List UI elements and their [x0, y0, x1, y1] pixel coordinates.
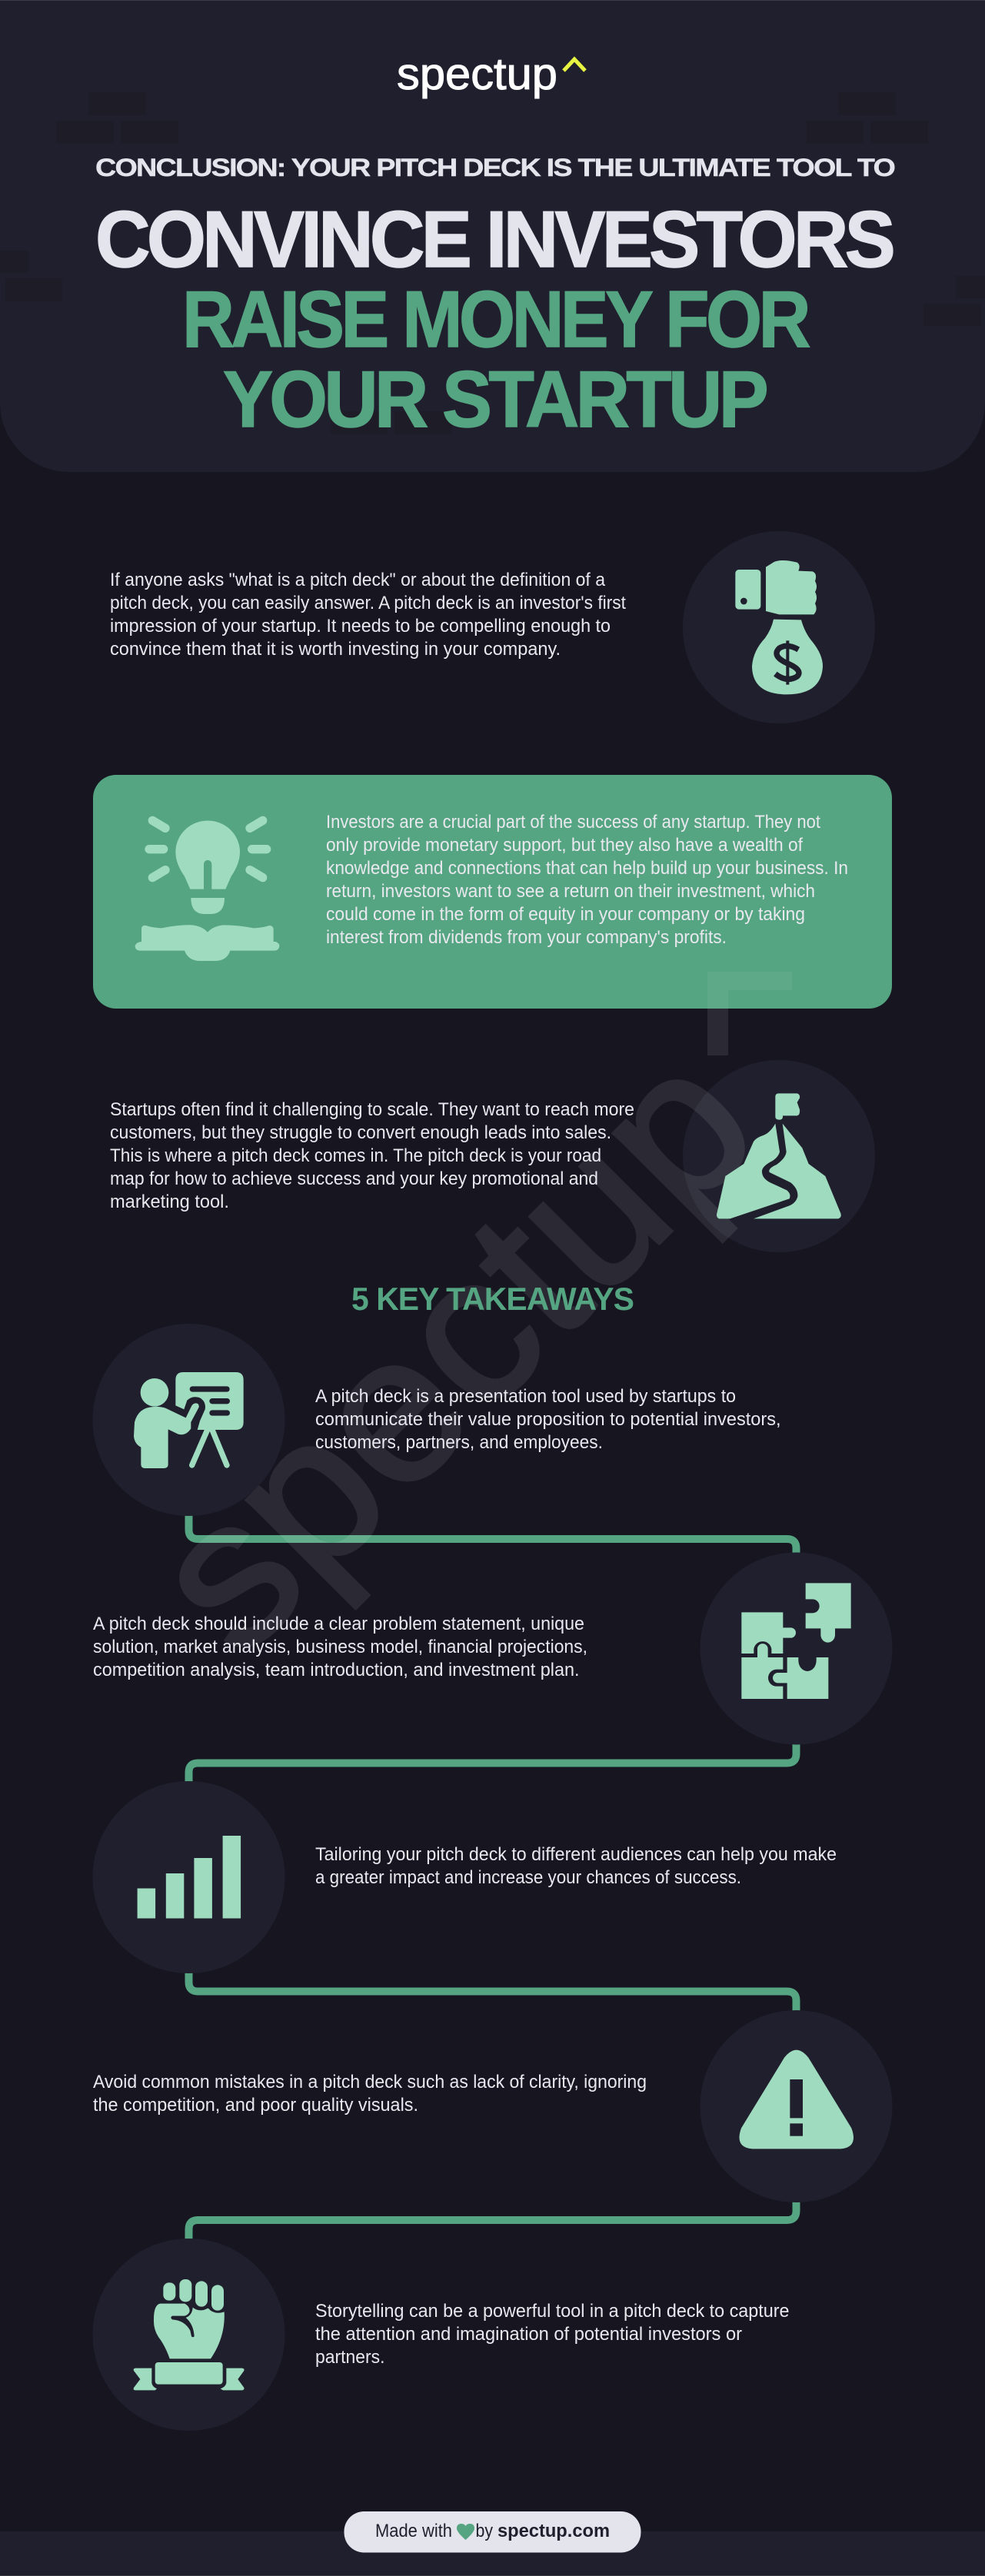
text: takeaway 3: Tailoring your pitch deck to different audiences can help you make [315, 1844, 837, 1865]
text: scaling paragraph: map for how to achieve success and your key promotional and [110, 1168, 598, 1189]
text: investors paragraph: only provide monetary support, but they also have a wealth of [326, 835, 803, 856]
footer badge: Made with [375, 2521, 452, 2541]
title: CONVINCE INVESTORS [95, 195, 893, 284]
text: intro paragraph [110, 570, 626, 660]
title: RAISE MONEY FOR [182, 275, 810, 364]
text: scaling paragraph [110, 1099, 634, 1212]
text: investors paragraph: interest from dividends from your company's profits. [326, 927, 727, 948]
text: investors paragraph: could come in the form of equity in your company or by taking [326, 904, 805, 925]
panel: header [0, 0, 985, 472]
text: takeaway 5: the attention and imagination of potential investors or [315, 2324, 742, 2345]
icon circle backgrounds [92, 531, 892, 2431]
icon: bar chart [138, 1836, 241, 1919]
text: takeaway 3: a greater impact and increase your chances of success. [315, 1867, 741, 1888]
icon: puzzle pieces [741, 1583, 851, 1699]
logo: spectup [397, 49, 557, 99]
watermark: spectup [106, 1004, 797, 1695]
footer badge [344, 2511, 641, 2552]
text: takeaway 1: A pitch deck is a presentation tool used by startups to [315, 1386, 736, 1407]
text: scaling paragraph: customers, but they struggle to convert enough leads into sales. [110, 1122, 611, 1143]
icon: warning triangle [739, 2050, 854, 2149]
text: intro paragraph: impression of your startup. It needs to be compelling enough to [110, 616, 611, 637]
text: takeaway 1: communicate their value proposition to potential investors, [315, 1409, 781, 1430]
text: takeaway 3 [315, 1844, 837, 1888]
icon: light bulb and book [135, 820, 279, 961]
footer badge: spectup.com [497, 2521, 610, 2541]
text: takeaway 5: Storytelling can be a powerful tool in a pitch deck to capture [315, 2301, 789, 2322]
text: investors paragraph [326, 812, 848, 948]
text: investors paragraph: return, investors want to see a return on their investment, which [326, 881, 815, 902]
text: intro paragraph: pitch deck, you can easily answer. A pitch deck is an investor's first [110, 593, 626, 613]
text: intro paragraph: If anyone asks "what is a pitch deck" or about the definition of a [110, 570, 606, 590]
footer strip [0, 2531, 985, 2576]
subtitle: CONCLUSION: YOUR PITCH DECK IS THE ULTIMATE TOOL TO [95, 154, 895, 181]
title [95, 195, 893, 444]
text: takeaway 2: A pitch deck should include a clear problem statement, unique [93, 1614, 584, 1634]
footer badge: by [475, 2521, 493, 2541]
text: takeaway 1: customers, partners, and employees. [315, 1432, 603, 1453]
text: takeaway 4: the competition, and poor quality visuals. [93, 2095, 418, 2116]
text: investors paragraph: knowledge and connections that can help build up your business. In [326, 858, 848, 879]
panel: investors callout [93, 775, 892, 1009]
heading: 5 key takeaways: 5 KEY TAKEAWAYS [351, 1281, 634, 1317]
icon: mountain with flag [717, 1093, 841, 1218]
text: takeaway 5: partners. [315, 2347, 384, 2368]
icon: presenter at board [134, 1372, 244, 1468]
timeline connectors [189, 1514, 797, 2241]
text: takeaway 2 [93, 1614, 587, 1680]
text: takeaway 2: competition analysis, team introduction, and investment plan. [93, 1660, 580, 1680]
title: YOUR STARTUP [223, 355, 767, 444]
text: takeaway 1 [315, 1386, 781, 1453]
icon: raised fist with ribbon [134, 2279, 245, 2390]
text: scaling paragraph: Startups often find it challenging to scale. They want to reach more [110, 1099, 634, 1120]
text: takeaway 5 [315, 2301, 789, 2368]
text: investors paragraph: Investors are a crucial part of the success of any startup. They not [326, 812, 820, 833]
text: takeaway 4: Avoid common mistakes in a pitch deck such as lack of clarity, ignoring [93, 2072, 647, 2092]
icon: hand with money bag [735, 560, 823, 694]
text: intro paragraph: convince them that it is worth investing in your company. [110, 639, 561, 660]
text: scaling paragraph: marketing tool. [110, 1192, 229, 1212]
text: takeaway 4 [93, 2072, 647, 2116]
text: takeaway 2: solution, market analysis, business model, financial projections, [93, 1637, 587, 1657]
text: scaling paragraph: This is where a pitch deck comes in. The pitch deck is your road [110, 1145, 601, 1166]
